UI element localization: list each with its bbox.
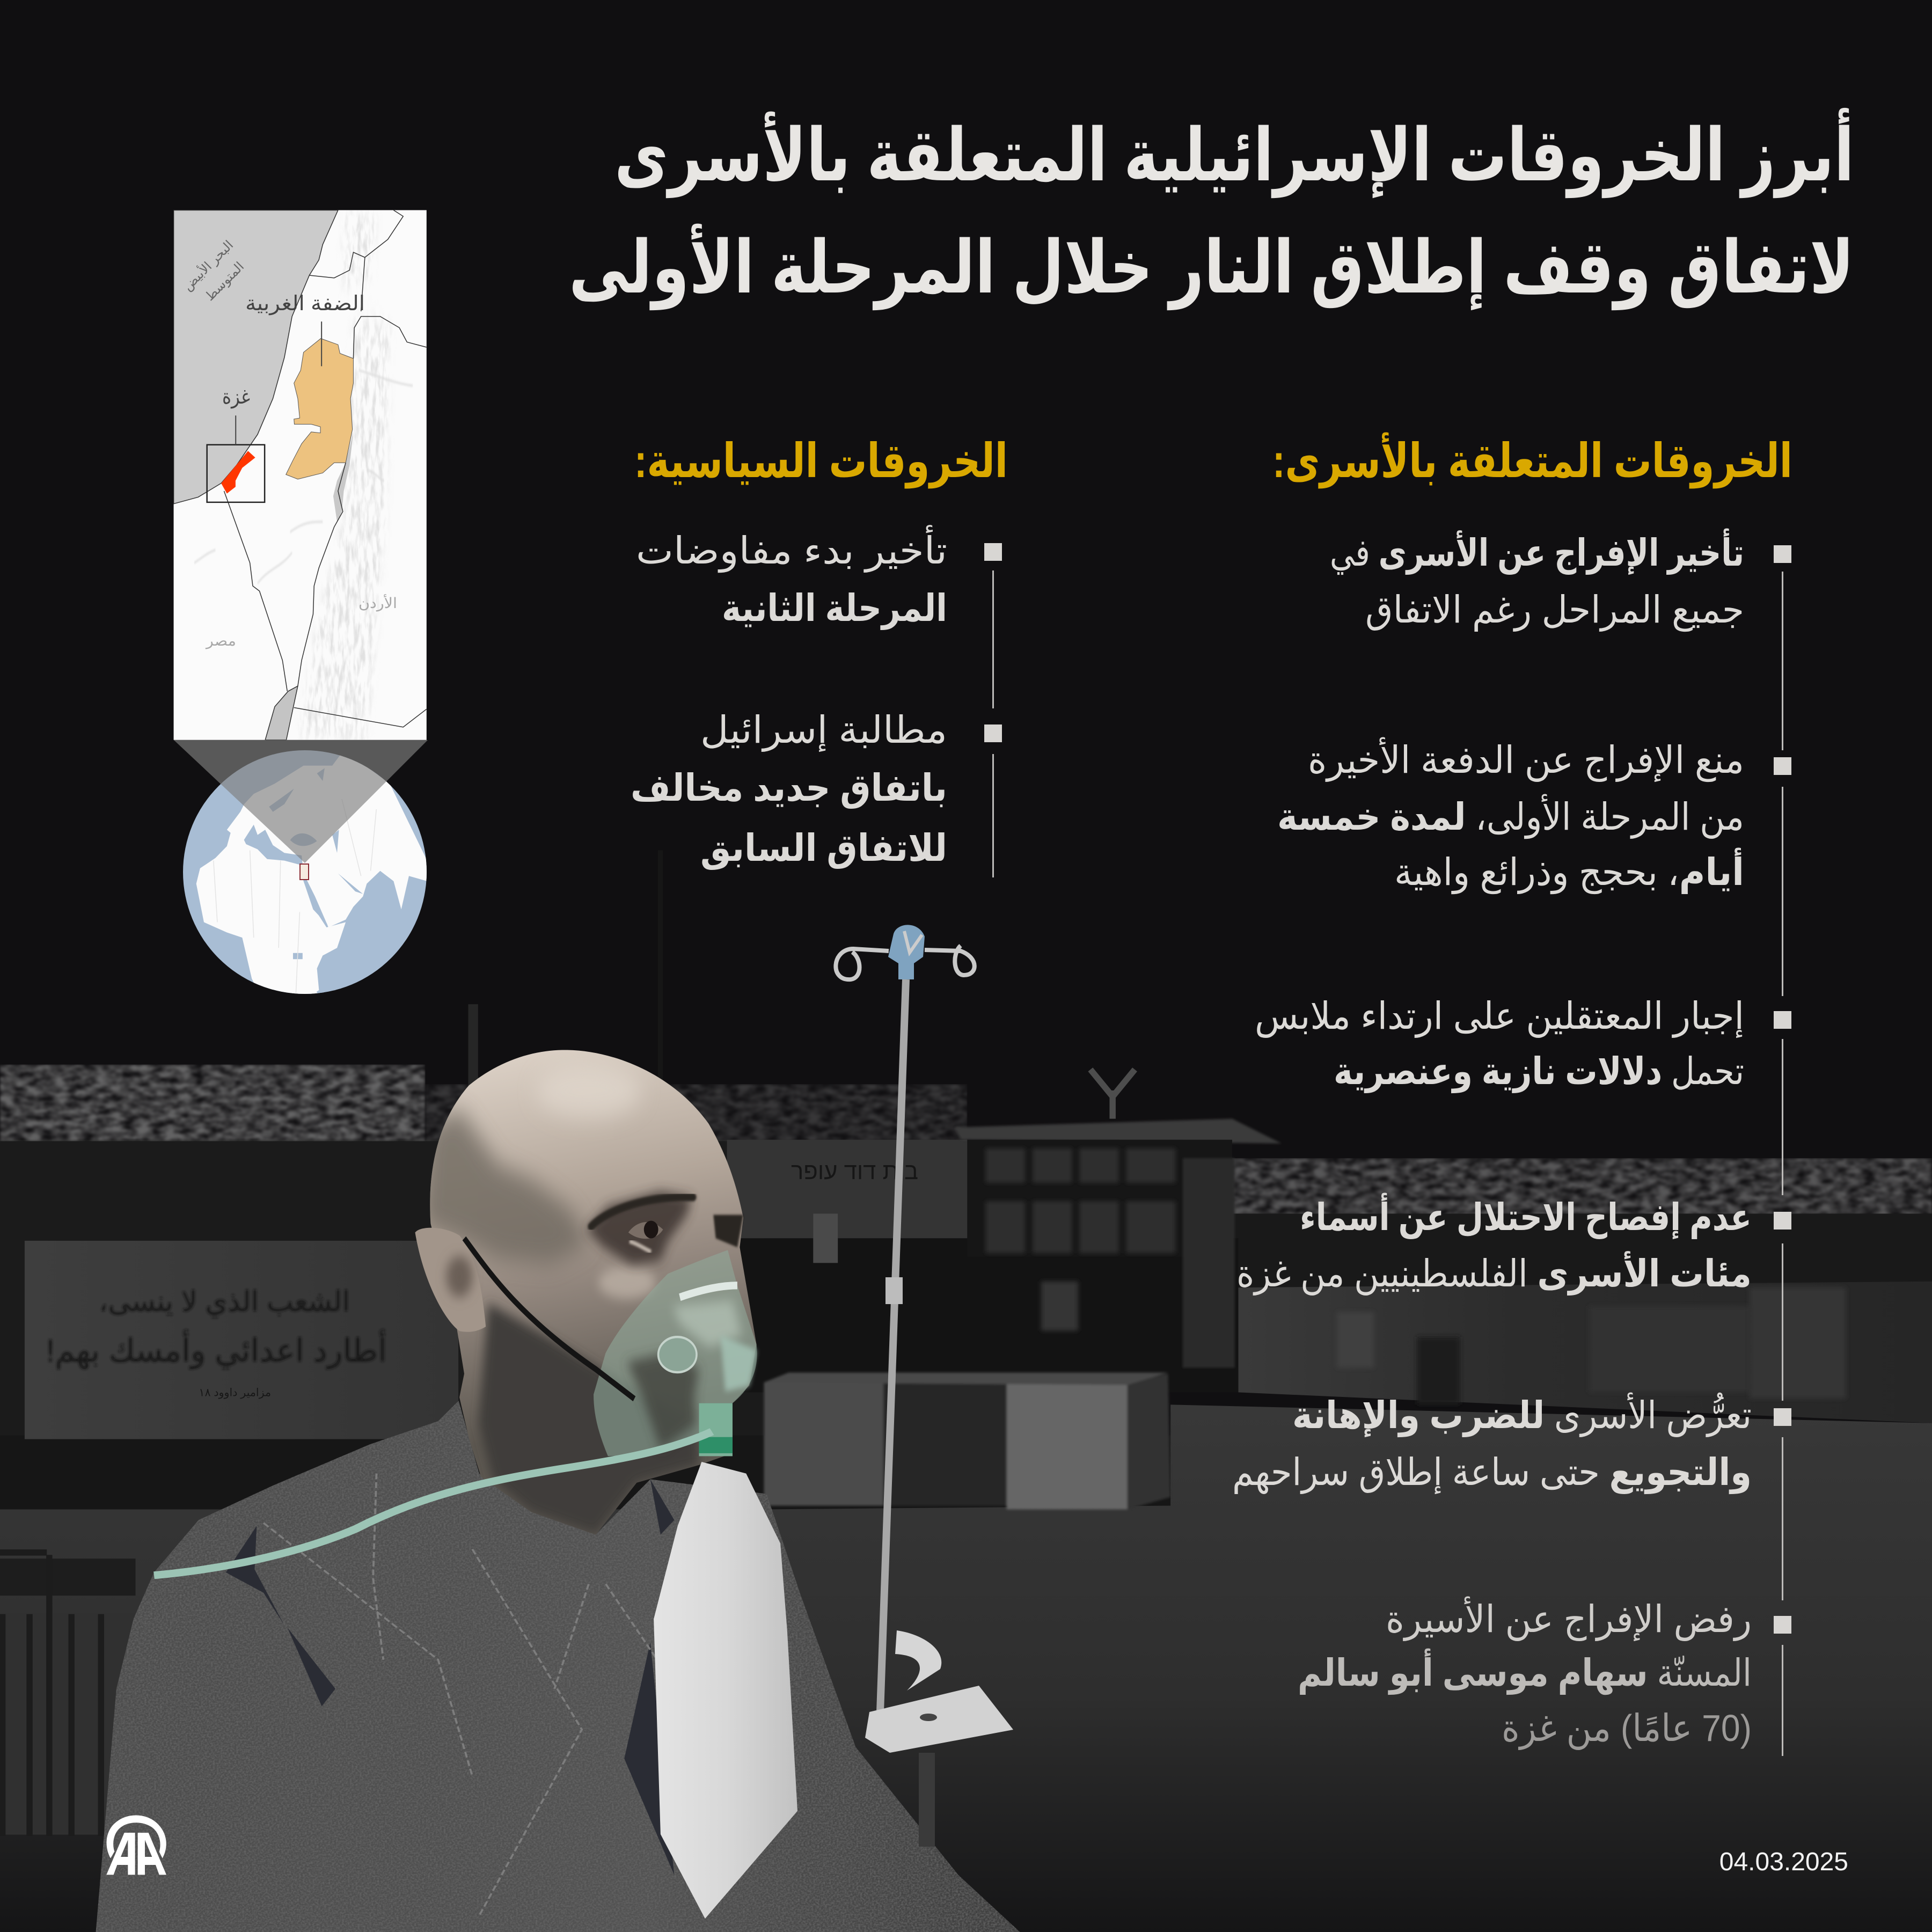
item 2 <box>631 709 947 870</box>
item 2: من المرحلة الأولى، لمدة خمسة <box>1277 794 1744 839</box>
West Bank <box>286 339 353 479</box>
map labels: البحر الأبيض <box>180 237 236 294</box>
locator map <box>174 210 427 740</box>
item 4: مئات الأسرى الفلسطينيين من غزة <box>1236 1251 1752 1296</box>
oxygen mask <box>594 1250 757 1456</box>
borders <box>224 210 427 727</box>
item 1 <box>636 525 947 630</box>
Eurasia <box>227 750 427 927</box>
Dead Sea <box>333 432 353 522</box>
item 6: المسنّة سهام موسى أبو سالم <box>1298 1648 1752 1695</box>
item 5: تعرُّض الأسرى للضرب والإهانة <box>1292 1392 1752 1438</box>
list: prisoner violations <box>1232 528 1791 1756</box>
item 1: تأخير الإفراج عن الأسرى في <box>1330 528 1744 575</box>
man: sweater <box>96 1401 1020 1932</box>
IV stand <box>836 925 1013 1847</box>
sign on wall: مزامير داوود ١٨ <box>199 1386 271 1399</box>
map labels: المتوسط <box>202 259 247 304</box>
heading: prisoner violations: الخروقات المتعلقة بالأسرى: <box>1272 432 1792 489</box>
item 1 <box>1330 528 1744 632</box>
IV base plate <box>865 1686 1013 1753</box>
list: political violations <box>631 525 1002 877</box>
item 1: المرحلة الثانية <box>722 587 947 630</box>
man: head and neck <box>415 1050 759 1535</box>
timeline bullets <box>1774 545 1791 1756</box>
timeline bullets <box>984 543 1002 877</box>
sea <box>174 210 338 504</box>
man: tube and bag <box>154 1432 797 1919</box>
logo: AA <box>106 1815 166 1875</box>
Gaza locator box <box>207 445 265 502</box>
eye <box>587 1191 743 1265</box>
item 2: أيام، بحجج وذرائع واهية <box>1394 847 1744 895</box>
ear <box>415 1228 486 1332</box>
item 4 <box>1236 1192 1752 1296</box>
item 2: للاتفاق السابق <box>700 827 947 870</box>
item 2 <box>1277 737 1744 895</box>
oxygen tube <box>154 1432 712 1575</box>
item 6: (70 عامًا) من غزة <box>1502 1707 1752 1750</box>
globe <box>183 750 427 1002</box>
reservoir bag <box>654 1462 797 1919</box>
item 6 <box>1298 1596 1752 1750</box>
item 5: والتجويع حتى ساعة إطلاق سراحهم <box>1232 1451 1752 1495</box>
map labels: مصر <box>205 633 236 649</box>
IV head <box>888 925 925 979</box>
globe locator box <box>300 864 309 880</box>
heading: political violations: الخروقات السياسية: <box>634 434 1008 489</box>
item 1: تأخير بدء مفاوضات <box>636 525 947 573</box>
Africa <box>196 832 346 1002</box>
title <box>569 108 1854 311</box>
concrete blocks <box>764 1373 1170 1509</box>
map labels: الأردن <box>358 594 397 612</box>
map labels <box>180 237 397 649</box>
background photo: prison scene <box>0 850 1932 1932</box>
item 6: رفض الإفراج عن الأسيرة <box>1386 1596 1752 1642</box>
item 2: مطالبة إسرائيل <box>700 709 947 752</box>
item 2: منع الإفراج عن الدفعة الأخيرة <box>1308 737 1744 782</box>
map labels: الضفة الغربية <box>245 292 365 316</box>
item 2: باتفاق جديد مخالف <box>631 767 947 809</box>
sign on wall: أطارد اعدائي وأمسك بهم! <box>46 1329 387 1370</box>
terrain shading <box>301 210 390 740</box>
sign on wall: الشعب الذي لا ينسى، <box>99 1286 350 1318</box>
Gulf of Aqaba <box>265 686 298 740</box>
item 1: جميع المراحل رغم الاتفاق <box>1365 589 1744 632</box>
date: 04.03.2025 <box>1719 1848 1848 1876</box>
background photo: prison scene: בית דוד עופר <box>791 1159 918 1184</box>
IV hooks <box>836 946 975 979</box>
map labels: غزة <box>222 386 250 409</box>
item 3: تحمل دلالات نازية وعنصرية <box>1334 1050 1744 1093</box>
zoom wedge <box>174 740 428 863</box>
item 4: عدم إفصاح الاحتلال عن أسماء <box>1300 1192 1752 1240</box>
item 3: إجبار المعتقلين على ارتداء ملابس <box>1255 995 1744 1038</box>
Gaza Strip <box>221 451 255 494</box>
sign on wall <box>25 1241 458 1439</box>
item 3 <box>1255 995 1744 1093</box>
item 5 <box>1232 1392 1752 1495</box>
head strap <box>464 1238 634 1399</box>
